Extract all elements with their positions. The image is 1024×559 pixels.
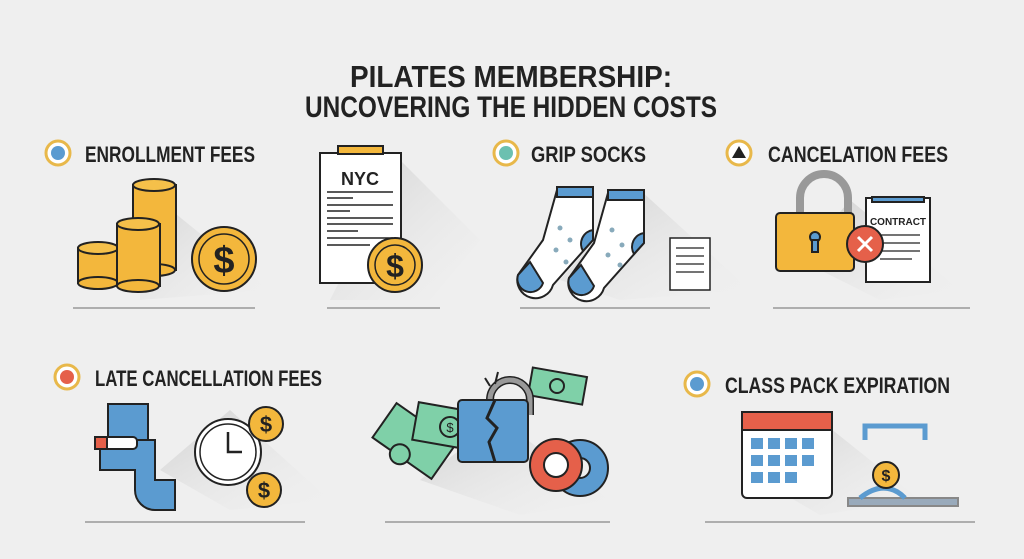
- icon: cash, broken lock, weight plates: [372, 368, 610, 515]
- icon: coin stacks: $: [213, 240, 235, 282]
- heading: class pack expiration: [685, 372, 950, 398]
- icon: grip socks and receipt: [517, 187, 750, 301]
- heading: late cancellation fees: [55, 365, 322, 391]
- title: PILATES MEMBERSHIP:: [350, 59, 672, 94]
- heading: grip socks: GRIP SOCKS: [531, 142, 646, 167]
- icon: padlock and contract: CONTRACT: [870, 217, 926, 228]
- heading: grip socks: [494, 141, 646, 167]
- heading: cancelation fees: CANCELATION FEES: [768, 142, 948, 167]
- icon: cash, broken lock, weight plates: $: [446, 420, 454, 435]
- icon: padlock and contract: [776, 174, 960, 300]
- icon: clipboard, clock, coins: $: [258, 478, 270, 503]
- title: UNCOVERING THE HIDDEN COSTS: [305, 91, 717, 124]
- icon: NYC document: NYC: [341, 169, 379, 189]
- heading: late cancellation fees: LATE CANCELLATION FEES: [95, 366, 322, 391]
- heading: class pack expiration: CLASS PACK EXPIRATION: [725, 373, 950, 398]
- icon: clipboard, clock, coins: $: [260, 412, 272, 437]
- icon: calendar, reformer and coin: $: [882, 468, 891, 485]
- heading: cancelation fees: [727, 141, 948, 167]
- title: [305, 59, 717, 124]
- icon: calendar, reformer and coin: [742, 412, 958, 515]
- icon: clipboard, clock, coins: [95, 404, 330, 510]
- heading: enrollment fees: [46, 141, 255, 167]
- icon: coin stacks: [78, 179, 270, 300]
- icon: NYC document: [320, 146, 480, 300]
- heading: enrollment fees: ENROLLMENT FEES: [85, 142, 255, 167]
- icon: NYC document: $: [386, 248, 404, 284]
